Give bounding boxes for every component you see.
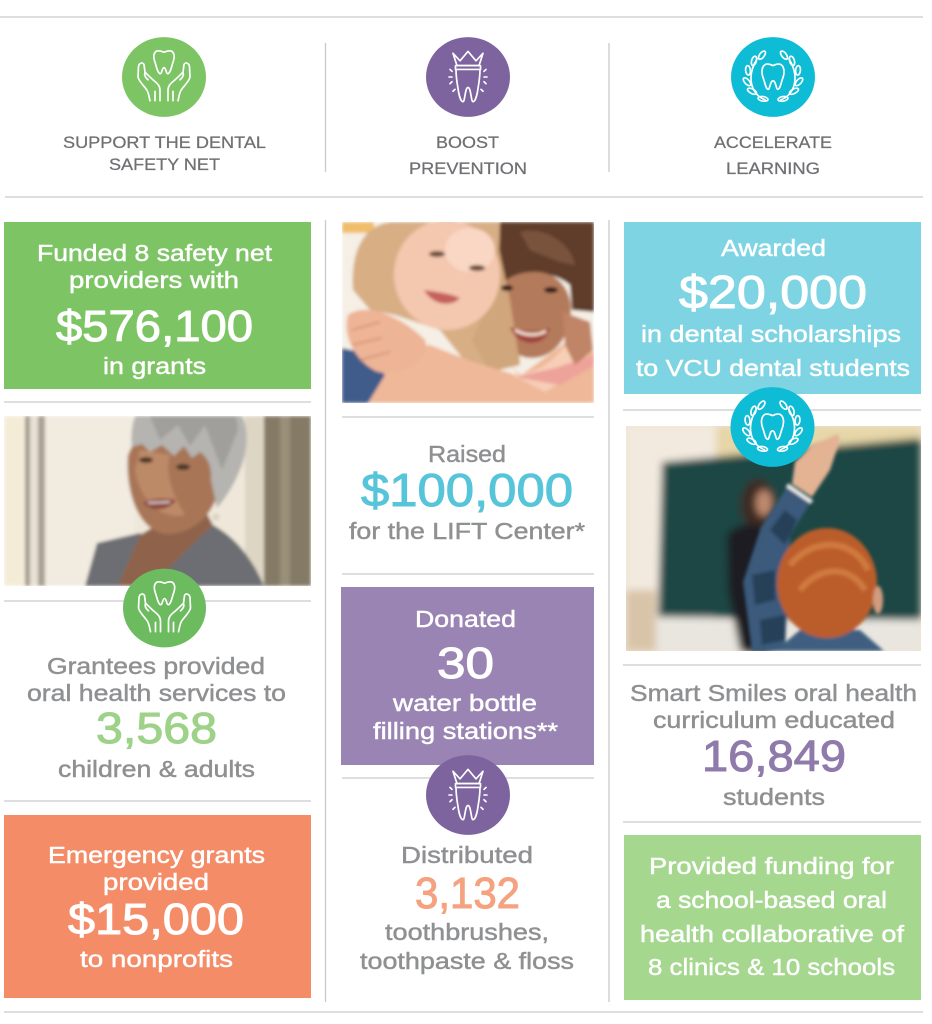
panel: dental scholarships: in dental scholarships: [641, 321, 901, 347]
panel: header support the dental safety net: [63, 37, 266, 174]
panel: funded safety net providers: providers with: [69, 267, 239, 293]
text block: grantees 3,568: [27, 653, 286, 782]
text block: distributed 3,132: [360, 842, 574, 974]
text block: smart smiles 16,849: [630, 680, 917, 810]
panel: school-based collaborative: 8 clinics & 10 schools: [648, 954, 895, 980]
photo: two hugging children: [342, 213, 594, 403]
panel: dental scholarships: Awarded: [721, 235, 826, 261]
heading: support the dental safety net: [63, 133, 266, 174]
panel: header accelerate learning: [714, 37, 832, 178]
text block: distributed 3,132: 3,132: [415, 869, 520, 918]
panel: funded safety net providers: $576,100: [56, 302, 253, 351]
text block: grantees 3,568: 3,568: [96, 704, 217, 753]
icon: tooth with laurel: [731, 37, 815, 117]
panel: funded safety net providers: in grants: [103, 353, 206, 379]
icon: tooth with crown badge: [426, 755, 510, 835]
panel: dental scholarships: to VCU dental students: [636, 355, 910, 381]
heading: accelerate learning: LEARNING: [726, 159, 820, 178]
text block: grantees 3,568: children & adults: [58, 756, 255, 782]
panel: donated water bottle stations: filling stations**: [373, 718, 558, 744]
panel: funded safety net providers: [4, 222, 311, 389]
text block: raised $100,000: Raised: [428, 441, 506, 467]
panel: header boost prevention: [409, 37, 527, 178]
panel: emergency grants: Emergency grants: [48, 842, 265, 868]
text block: grantees 3,568: oral health services to: [27, 680, 286, 706]
text block: distributed 3,132: toothpaste & floss: [360, 948, 574, 974]
text block: smart smiles 16,849: students: [723, 784, 825, 810]
text block: grantees 3,568: Grantees provided: [47, 653, 265, 679]
icon: tooth with crown: [426, 37, 510, 117]
panel: donated water bottle stations: 30: [437, 639, 494, 688]
text block: smart smiles 16,849: Smart Smiles oral health: [630, 680, 917, 706]
heading: accelerate learning: [714, 133, 832, 178]
icon: tooth with laurel badge: [730, 387, 814, 467]
text block: raised $100,000: for the LIFT Center*: [349, 518, 585, 544]
text block: smart smiles 16,849: 16,849: [702, 732, 846, 781]
heading: boost prevention: [409, 133, 527, 178]
panel: emergency grants: $15,000: [68, 895, 244, 944]
panel: donated water bottle stations: [341, 587, 594, 765]
text block: smart smiles 16,849: curriculum educated: [653, 707, 895, 733]
heading: accelerate learning: ACCELERATE: [714, 133, 832, 152]
photo: smiling older woman: [4, 416, 311, 586]
icon: hands holding tooth: [122, 37, 206, 117]
text block: raised $100,000: $100,000: [361, 464, 573, 516]
photo: child raising hand in classroom: [626, 426, 921, 651]
panel: dental scholarships: [624, 222, 921, 394]
panel: funded safety net providers: Funded 8 safety net: [37, 240, 273, 266]
text block: raised $100,000: [349, 441, 585, 544]
heading: boost prevention: PREVENTION: [409, 159, 527, 178]
panel: emergency grants: [4, 815, 311, 998]
panel: school-based collaborative: health collaborative of: [640, 921, 905, 947]
heading: support the dental safety net: SUPPORT THE DENTAL: [63, 133, 266, 152]
heading: boost prevention: BOOST: [436, 133, 499, 152]
panel: school-based collaborative: [624, 835, 921, 1000]
panel: school-based collaborative: a school-based oral: [656, 887, 887, 913]
panel: donated water bottle stations: water bottle: [392, 690, 537, 716]
text block: distributed 3,132: toothbrushes,: [385, 919, 549, 945]
panel: emergency grants: provided: [103, 869, 209, 895]
panel: emergency grants: to nonprofits: [80, 946, 233, 972]
icon: hands holding tooth badge: [123, 569, 206, 647]
text block: distributed 3,132: Distributed: [401, 842, 533, 868]
panel: dental scholarships: $20,000: [679, 266, 867, 318]
heading: support the dental safety net: SAFETY NET: [109, 155, 220, 174]
panel: donated water bottle stations: Donated: [415, 606, 516, 632]
panel: school-based collaborative: Provided funding for: [649, 853, 894, 879]
